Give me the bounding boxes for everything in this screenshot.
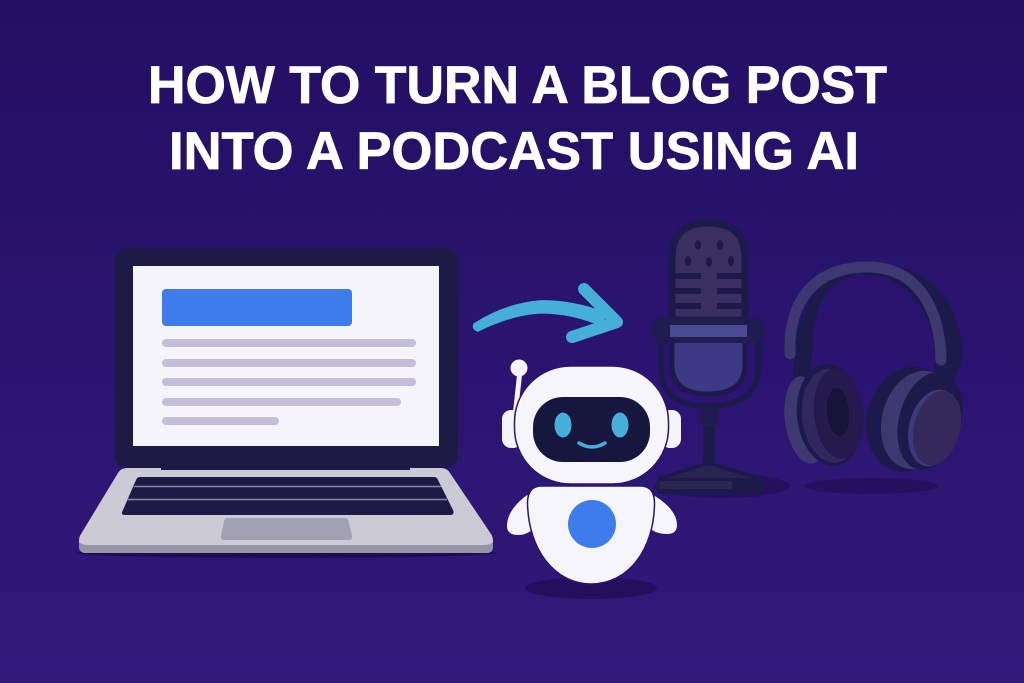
title — [148, 56, 887, 181]
screen — [133, 266, 439, 446]
trackpad — [221, 518, 352, 540]
robot chest light — [568, 500, 616, 548]
arrow — [474, 289, 617, 337]
title: HOW TO TURN A BLOG POST — [148, 56, 887, 115]
mic grille — [673, 240, 745, 309]
headband — [790, 264, 962, 378]
icon: laptop — [76, 248, 496, 558]
icon: microphone — [652, 223, 790, 498]
mic capsule — [652, 223, 765, 394]
robot head — [514, 366, 668, 484]
left ear cup — [779, 361, 868, 469]
robot arms — [507, 495, 677, 535]
laptop base — [79, 468, 493, 553]
mic stand — [657, 408, 764, 494]
blog headline bar — [162, 289, 352, 326]
mic collar — [652, 318, 765, 343]
robot body — [528, 486, 654, 584]
blog text lines — [162, 339, 416, 425]
icon: headphones — [779, 264, 973, 494]
icon: robot — [502, 360, 681, 599]
robot smile — [579, 443, 605, 447]
laptop lid — [115, 248, 458, 468]
robot face screen — [533, 397, 650, 462]
keyboard — [122, 477, 454, 515]
antenna — [510, 360, 528, 412]
robot eyes — [554, 412, 628, 438]
right ear cup — [855, 357, 973, 481]
title: INTO A PODCAST USING AI — [169, 122, 859, 181]
mic yoke — [661, 340, 758, 406]
robot ears — [502, 410, 681, 448]
